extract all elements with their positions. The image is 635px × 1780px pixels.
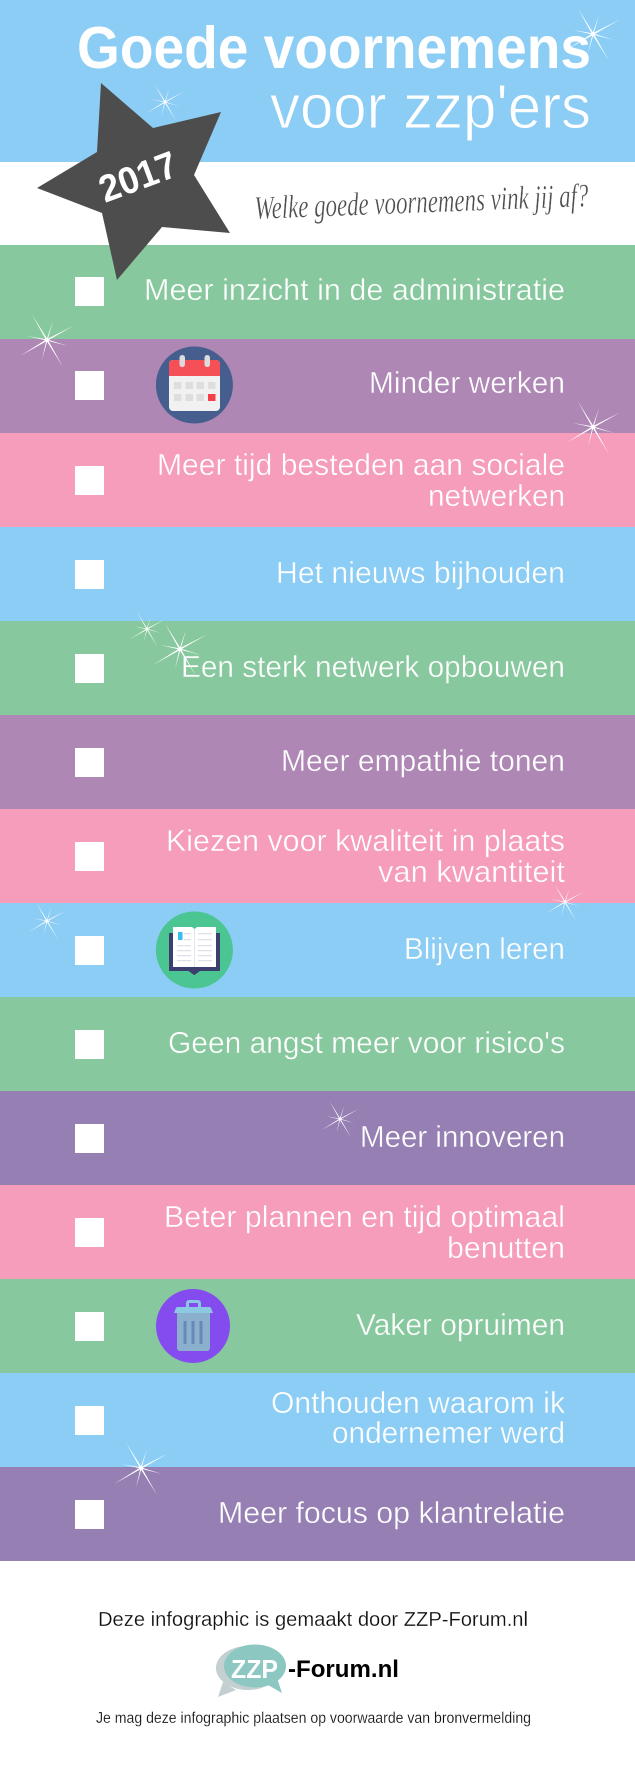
checkbox <box>75 277 104 306</box>
row 11 <box>0 1185 635 1279</box>
checkbox <box>75 748 104 777</box>
label: van kwantiteit <box>378 854 565 889</box>
footer permission note: Je mag deze infographic plaatsen op voorwaarde van bronvermelding <box>96 1710 531 1727</box>
label: Meer tijd besteden aan sociale <box>157 447 565 482</box>
footer credit: Deze infographic is gemaakt door ZZP-Forum.nl <box>98 1608 528 1631</box>
logo: ZZP-Forum.nl <box>216 1644 399 1697</box>
checkbox <box>75 466 104 495</box>
checkbox <box>75 654 104 683</box>
row 6 <box>0 715 635 809</box>
icon: open book <box>156 912 233 988</box>
row 12 <box>0 1279 635 1373</box>
checkbox <box>75 371 104 400</box>
label: Meer innoveren <box>360 1119 565 1154</box>
row 2 <box>0 339 635 433</box>
checkbox <box>75 936 104 965</box>
label: Meer inzicht in de administratie <box>144 272 565 307</box>
row 14 <box>0 1467 635 1561</box>
star badge <box>37 83 230 280</box>
label: Kiezen voor kwaliteit in plaats <box>166 823 565 858</box>
label <box>166 823 565 889</box>
label: Vaker opruimen <box>356 1307 565 1342</box>
row 9 <box>0 997 635 1091</box>
checkbox <box>75 1500 104 1529</box>
label: Het nieuws bijhouden <box>276 555 565 590</box>
checkbox <box>75 1406 104 1435</box>
row 4 <box>0 527 635 621</box>
label: Meer empathie tonen <box>281 743 565 778</box>
label: Minder werken <box>369 365 565 400</box>
label: Onthouden waarom ik <box>271 1385 565 1420</box>
row 10 <box>0 1091 635 1185</box>
label: Meer focus op klantrelatie <box>218 1495 565 1530</box>
checkbox <box>75 560 104 589</box>
row 3 <box>0 433 635 527</box>
label: ondernemer werd <box>332 1415 565 1450</box>
label: Een sterk netwerk opbouwen <box>181 649 565 684</box>
row 1 <box>0 245 635 339</box>
row 13 <box>0 1373 635 1467</box>
label: netwerken <box>428 478 565 513</box>
label: benutten <box>447 1230 565 1265</box>
row 8 <box>0 903 635 997</box>
row 7 <box>0 809 635 903</box>
label <box>164 1199 565 1265</box>
checkbox <box>75 842 104 871</box>
icon: calendar <box>156 346 233 424</box>
title line 2: voor zzp'ers <box>270 73 591 142</box>
label <box>271 1385 565 1450</box>
logo: ZZP-Forum.nl: ZZP <box>231 1654 278 1684</box>
label: Geen angst meer voor risico's <box>168 1025 565 1060</box>
checkbox <box>75 1312 104 1341</box>
label: Beter plannen en tijd optimaal <box>164 1199 565 1234</box>
title line 1: Goede voornemens <box>77 15 591 81</box>
label <box>157 447 565 513</box>
logo: ZZP-Forum.nl: -Forum.nl <box>288 1656 399 1683</box>
checkbox <box>75 1030 104 1059</box>
year: 2017 <box>93 144 183 211</box>
checkbox <box>75 1124 104 1153</box>
subtitle band <box>0 162 635 245</box>
checkbox <box>75 1218 104 1247</box>
sparkles <box>20 8 620 1495</box>
row 5 <box>0 621 635 715</box>
icon: trash can <box>156 1289 230 1363</box>
label: Blijven leren <box>404 931 565 966</box>
header band <box>0 0 635 162</box>
